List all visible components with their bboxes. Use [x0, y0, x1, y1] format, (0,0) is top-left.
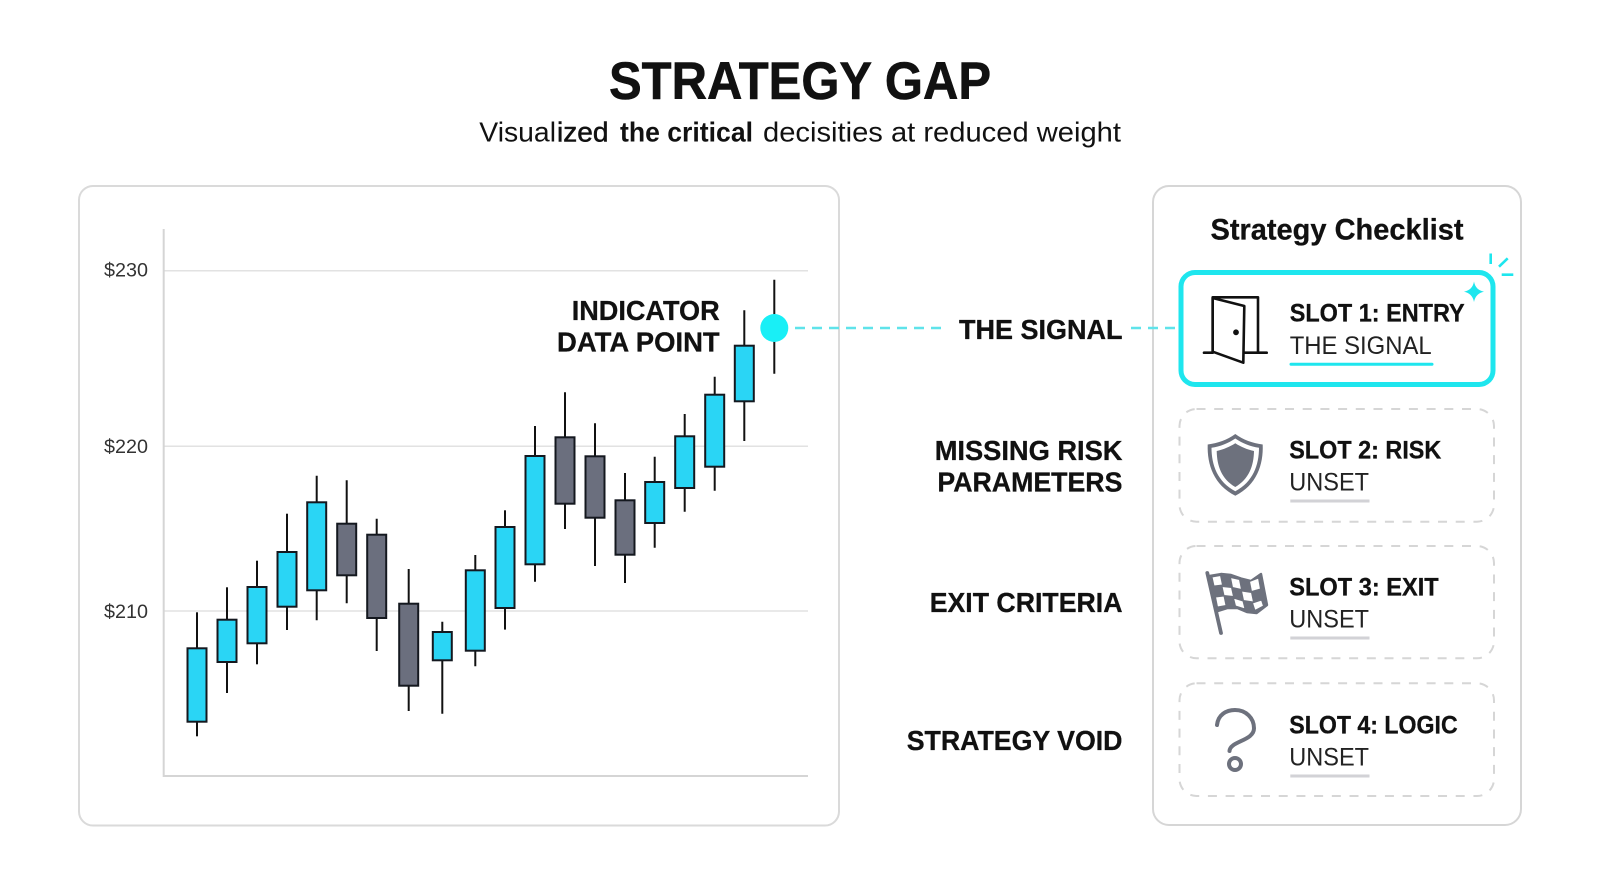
slot 4 title: SLOT 4: LOGIC	[1289, 711, 1458, 739]
gap labels	[907, 314, 1122, 756]
slot 3: exit	[1180, 546, 1494, 658]
candle 1	[188, 612, 206, 736]
candle 5	[307, 476, 326, 620]
slot 1: entry	[1181, 254, 1513, 384]
label: missing risk parameters: PARAMETERS	[937, 466, 1122, 497]
title: STRATEGY GAP	[609, 52, 991, 111]
price axis labels	[104, 260, 148, 623]
slot 3 underline	[1290, 636, 1370, 640]
slot 2 value: UNSET	[1289, 469, 1369, 497]
candle 19	[735, 310, 754, 441]
label: the signal: THE SIGNAL	[959, 314, 1122, 345]
price axis labels: $210	[104, 602, 148, 623]
slot 1 value: THE SIGNAL	[1290, 332, 1432, 360]
slot 4 value: UNSET	[1289, 743, 1369, 771]
candle 14	[586, 423, 604, 566]
active slot box	[1181, 272, 1493, 384]
empty slot box	[1180, 683, 1494, 796]
slot 4 underline	[1290, 774, 1370, 778]
candlestick series	[188, 280, 774, 736]
slot 3 title: SLOT 3: EXIT	[1289, 574, 1439, 602]
price axis labels: $230	[104, 260, 148, 282]
indicator label: DATA POINT	[557, 327, 720, 358]
slot 2: risk	[1180, 409, 1494, 522]
slot 1 title: SLOT 1: ENTRY	[1290, 300, 1465, 328]
candle 8	[399, 569, 418, 711]
candle 10	[466, 555, 485, 666]
icon: door	[1204, 297, 1267, 363]
grid lines and axes	[164, 229, 808, 776]
checklist heading: Strategy Checklist	[1210, 213, 1464, 246]
slot 3 value: UNSET	[1289, 606, 1369, 634]
icon: question mark	[1217, 710, 1254, 770]
subtitle: decisities at reduced weight	[763, 117, 1121, 148]
label: missing risk parameters: MISSING RISK	[935, 435, 1122, 466]
candle 20 wick	[773, 280, 775, 374]
candle 6	[337, 480, 356, 603]
icon: shield	[1208, 434, 1263, 496]
slot 2 title: SLOT 2: RISK	[1289, 437, 1441, 465]
candle 9	[433, 622, 452, 714]
connector: dashed line to the signal label	[795, 327, 945, 329]
slot 2 underline	[1290, 500, 1370, 502]
candle 11	[496, 510, 514, 630]
candle 15	[616, 473, 634, 583]
empty slot box	[1180, 409, 1494, 522]
candle 3	[248, 561, 266, 664]
panel: strategy checklist	[1153, 186, 1521, 825]
candle 4	[278, 514, 296, 630]
candle 17	[675, 414, 694, 512]
checklist card	[1153, 186, 1521, 825]
slot 1 underline	[1291, 363, 1432, 366]
subtitle: the critical	[620, 117, 753, 148]
subtitle	[479, 117, 1121, 148]
subtitle: ized	[557, 117, 608, 148]
label: exit criteria: EXIT CRITERIA	[930, 587, 1122, 618]
panel: chart	[79, 186, 839, 826]
slot 4: logic	[1180, 683, 1494, 796]
price axis labels: $220	[104, 437, 148, 458]
label: strategy void: STRATEGY VOID	[907, 725, 1122, 756]
candle 7	[367, 519, 386, 651]
connector: dashed line to slot 1	[1131, 327, 1178, 329]
indicator label: INDICATOR	[572, 295, 720, 326]
icon: sparkle	[1464, 254, 1513, 302]
empty slot box	[1180, 546, 1494, 658]
candle 16	[645, 457, 664, 548]
icon: checkered flag	[1207, 573, 1267, 633]
subtitle: Visual	[479, 117, 556, 148]
candle 2	[218, 587, 236, 693]
indicator data point	[760, 314, 788, 342]
candle 12	[526, 426, 544, 582]
candle 13	[556, 392, 574, 529]
label: missing risk parameters	[935, 435, 1122, 497]
chart card	[79, 186, 839, 826]
candle 18	[705, 377, 724, 491]
indicator label	[557, 295, 720, 358]
